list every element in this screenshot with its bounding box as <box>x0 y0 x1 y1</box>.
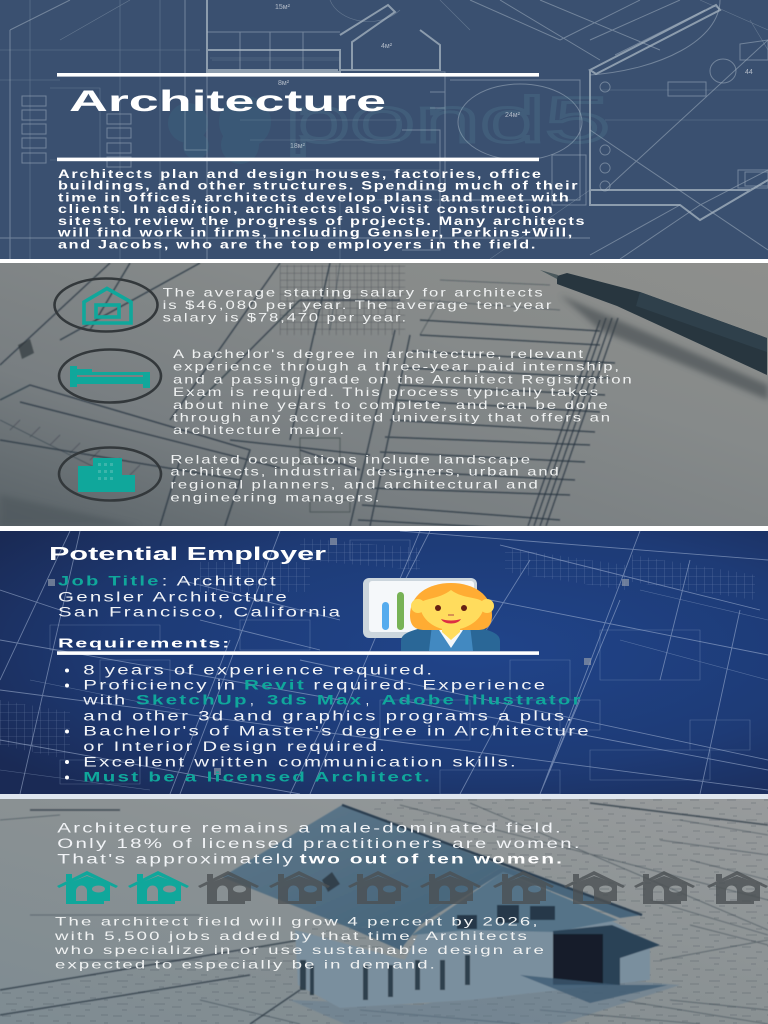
rule <box>57 651 539 655</box>
requirements list: and other 3d and graphics programs a plus. <box>83 708 574 723</box>
title: Architecture <box>69 85 386 118</box>
text: education: about nine years to complete, and can be done <box>173 398 610 412</box>
requirements list: 8 years of experience required. <box>83 663 434 678</box>
requirements list: required. Experience <box>313 677 547 692</box>
intro text: Architects plan and design houses, factories, office <box>58 169 543 181</box>
requirements list: 3ds Max <box>267 693 363 708</box>
requirements list: with <box>82 693 127 708</box>
requirements list: or Interior Design required. <box>83 739 387 754</box>
text: education: and a passing grade on the Architect Registration <box>173 372 634 386</box>
text: job outlook: with 5,500 jobs added by that time. Architects <box>53 929 529 943</box>
model house <box>222 805 680 1024</box>
job details: Job Title <box>58 574 161 589</box>
text: salary: is $46,080 per year. The average ten-year <box>163 298 553 312</box>
requirements list: Bachelor's of Master's degree in Architecture <box>83 724 591 739</box>
intro text: buildings, and other structures. Spending much of their <box>58 180 579 192</box>
text: education: through any accredited university that offers an <box>173 410 612 424</box>
text: gender statistic: Only 18% of licensed practitioners are women. <box>57 836 582 851</box>
panel: women in architecture and outlook <box>0 799 768 1024</box>
text: education: experience through a three-year paid internship, <box>173 360 621 374</box>
requirements list: , <box>366 693 371 708</box>
icon: house in circle <box>54 278 158 332</box>
text: related occupations: engineering managers. <box>170 490 381 504</box>
panel: career facts <box>0 263 768 530</box>
text: job outlook: expected to especially be in demand. <box>55 957 437 971</box>
text: education: A bachelor's degree in architecture, relevant <box>173 347 585 361</box>
job details <box>58 574 342 620</box>
intro text <box>57 169 586 251</box>
intro text: and Jacobs, who are the top employers in the field. <box>58 239 537 251</box>
requirements list: SketchUp <box>136 693 249 708</box>
requirements list <box>65 663 591 785</box>
text: education: architecture major. <box>173 423 346 437</box>
photo background: house model on plans <box>0 799 768 1024</box>
icon: woman presenter with chart <box>363 578 500 651</box>
house icon 2 highlighted <box>128 871 189 904</box>
panel: introduction <box>0 0 768 259</box>
text: gender statistic: That's approximately <box>57 851 295 866</box>
text: job outlook <box>53 914 546 971</box>
text: salary <box>163 285 553 324</box>
requirements list: Excellent written communication skills. <box>83 754 518 769</box>
text: salary: The average starting salary for architects <box>163 285 545 299</box>
bottom rule <box>57 158 539 161</box>
text: education <box>173 347 634 437</box>
intro text: will find work in firms, including Gensler, Perkins+Will, <box>57 228 574 240</box>
text: gender statistic: Architecture remains a male-dominated field. <box>57 820 563 835</box>
photo background: blueprint and pen <box>0 263 768 530</box>
text: gender statistic: two out of ten women. <box>300 851 564 866</box>
blueprint room labels <box>275 4 753 150</box>
text: related occupations: Related occupations include landscape <box>170 452 532 466</box>
requirements list: Proficiency in <box>83 677 237 692</box>
top rule <box>57 73 539 77</box>
text: job outlook: who specialize in or use sustainable design are <box>53 943 546 957</box>
blueprint background: floor plan <box>0 0 768 259</box>
job details: San Francisco, California <box>58 605 342 620</box>
watermark: pond5 <box>285 84 610 156</box>
intro text: clients. In addition, architects also visit construction <box>58 204 554 216</box>
icons: ten houses, two highlighted <box>57 871 768 904</box>
text: related occupations: architects, industrial designers, urban and <box>170 465 561 479</box>
panel: potential employer <box>0 531 768 794</box>
blueprint room labels: 44 <box>745 69 753 76</box>
blueprint room labels: 4м² <box>381 43 393 50</box>
text: gender statistic <box>57 820 582 866</box>
intro text: time in offices, architects develop plans and meet with <box>58 192 570 204</box>
icon: bed in circle <box>59 350 161 402</box>
requirements list: Adobe Illustrator <box>382 693 583 708</box>
job details: : Architect <box>162 574 278 589</box>
pen <box>540 270 768 400</box>
text: salary: salary is $78,470 per year. <box>163 310 408 324</box>
house icons 3 to 10 grey <box>198 871 768 904</box>
requirements heading: Requirements: <box>58 635 231 650</box>
requirements list: Revit <box>244 677 306 692</box>
blueprint room labels: 18м² <box>290 143 306 150</box>
house icon 1 highlighted <box>57 871 118 904</box>
requirements list: Must be a licensed Architect. <box>83 770 432 785</box>
text: related occupations <box>170 452 561 504</box>
text: related occupations: regional planners, and architectural and <box>170 478 540 492</box>
blueprint room labels: 8м² <box>278 80 290 87</box>
text: education: Exam is required. This process typically takes <box>173 385 600 399</box>
intro text: sites to review the progress of projects. Many architects <box>58 216 586 228</box>
requirements list: , <box>250 693 255 708</box>
blueprint background: building plan <box>0 531 768 794</box>
watermark <box>168 84 610 164</box>
blueprint room labels: 15м² <box>275 4 291 11</box>
text: job outlook: The architect field will grow 4 percent by 2026, <box>55 914 540 928</box>
blueprint room labels: 24м² <box>505 112 521 119</box>
icon: building in circle <box>59 448 161 500</box>
heading: Potential Employer <box>49 544 326 564</box>
job details: Gensler Architecture <box>58 589 289 604</box>
